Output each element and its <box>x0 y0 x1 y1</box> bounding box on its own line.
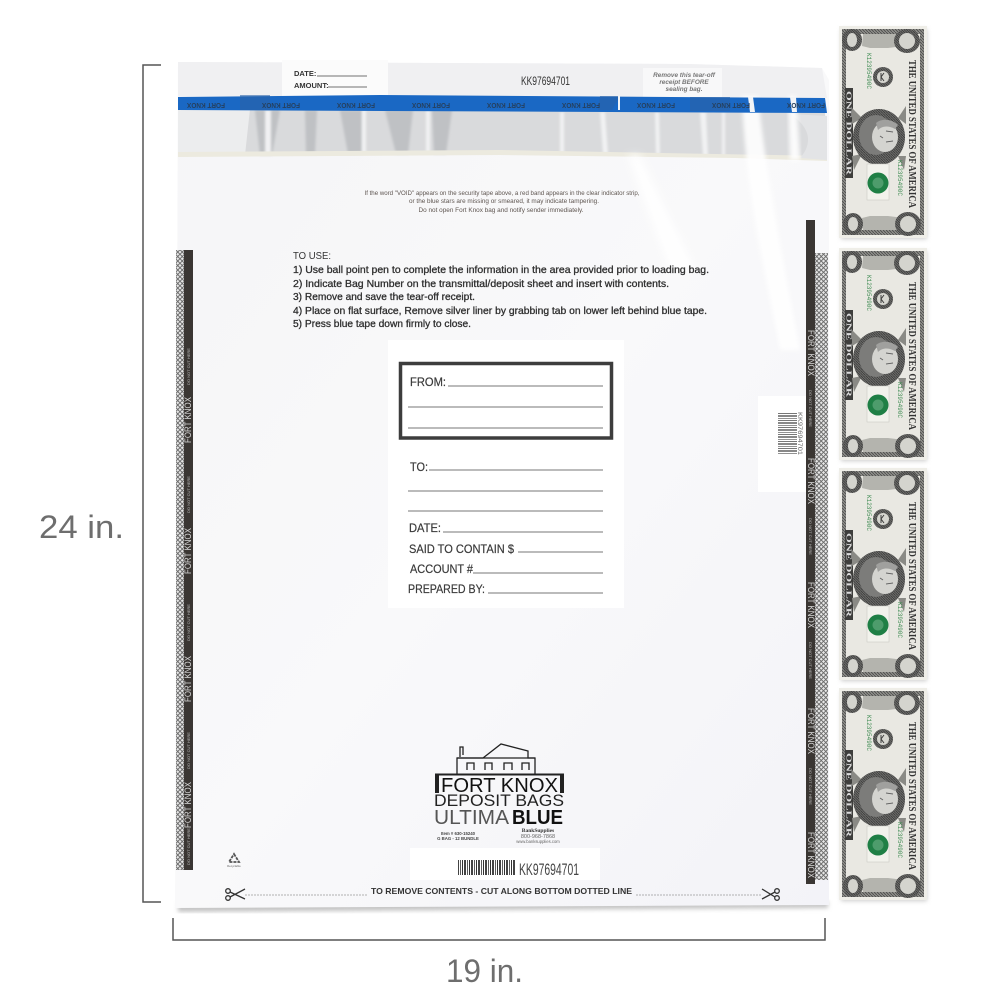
contents field: SAID TO CONTAIN $ <box>409 542 514 556</box>
right side seal strip <box>805 220 828 884</box>
dollar bill 2: K12395490C <box>865 275 872 311</box>
to fields: TO: <box>410 460 428 474</box>
account field: ACCOUNT # <box>410 562 473 576</box>
left side seal strip: DO NOT CUT HERE <box>186 828 191 865</box>
instructions: 5) Press blue tape down firmly to close. <box>293 318 471 330</box>
instructions: TO USE: <box>293 250 331 262</box>
dollar bill 3: K12395490C <box>896 602 903 638</box>
BankSupplies contact: www.banksupplies.com <box>516 839 560 844</box>
icon: right scissors <box>762 889 779 900</box>
dollar bill 4: K12395490C <box>896 822 903 858</box>
item number <box>437 831 479 841</box>
logo: FORT KNOX: FORT KNOX <box>441 775 558 797</box>
instructions <box>293 250 709 330</box>
dollar bill 4 <box>839 688 927 901</box>
dollar bill 4: THE UNITED STATES OF AMERICA <box>906 722 917 870</box>
deposit bag <box>175 60 829 912</box>
blue security tape: FORT KNOX <box>412 101 450 110</box>
dollar bill 2 <box>839 248 927 461</box>
bottom barcode label <box>410 848 600 880</box>
right side seal strip: DO NOT CUT HERE <box>808 390 813 427</box>
right side seal strip: FORT KNOX <box>805 458 816 505</box>
VOID warning note: or the blue stars are missing or smeared, it may indicate tampering. <box>409 198 599 205</box>
blue security tape: FORT KNOX <box>262 101 300 110</box>
BankSupplies contact: 800-968-7868 <box>521 834 555 840</box>
dimension: width label: 19 in. <box>446 953 523 989</box>
left side seal strip: FORT KNOX <box>183 396 194 443</box>
right side seal strip: FORT KNOX <box>805 582 816 629</box>
bottom barcode label: KK97694701 <box>519 860 579 879</box>
left side seal strip: DO NOT CUT HERE <box>186 476 191 513</box>
blue security tape: FORT KNOX <box>562 101 600 110</box>
logo: ULTIMA BLUE: ULTIMA <box>434 807 510 829</box>
logo building <box>435 744 564 775</box>
dollar bill 2: K12395490C <box>896 382 903 418</box>
dimension: width bracket <box>173 918 825 940</box>
BankSupplies contact: BankSupplies <box>522 828 554 834</box>
blue security tape: FORT KNOX <box>337 101 375 110</box>
blue security tape: FORT KNOX <box>487 101 525 110</box>
dollar bill 4: K12395490C <box>865 715 872 751</box>
logo bars <box>435 775 564 793</box>
cut instruction: TO REMOVE CONTENTS - CUT ALONG BOTTOM DOTTED LINE <box>371 886 632 896</box>
blue security tape: FORT KNOX <box>787 101 825 110</box>
blue security tape <box>178 95 827 113</box>
logo: DEPOSIT BAGS: DEPOSIT BAGS <box>434 791 564 810</box>
address form <box>388 340 624 608</box>
receipt date and amount fields: DATE: <box>294 69 316 78</box>
instructions: 2) Indicate Bag Number on the transmittal/deposit sheet and insert with contents. <box>293 278 669 290</box>
item number: G BAG - 12 BUNDLE <box>437 836 479 841</box>
cut line <box>245 894 762 896</box>
top bag number: KK97694701 <box>521 74 570 88</box>
instructions: 3) Remove and save the tear-off receipt. <box>293 291 475 303</box>
dollar bill 3 <box>839 468 927 681</box>
size comparison: stacked dollar bills <box>839 26 927 901</box>
right side seal strip: FORT KNOX <box>805 832 816 879</box>
dollar bill 3: ONE DOLLAR <box>844 533 854 618</box>
date field: DATE: <box>409 521 441 535</box>
left side seal strip: DO NOT CUT HERE <box>186 348 191 385</box>
side barcode label <box>758 396 806 492</box>
plastic reflections <box>628 96 800 350</box>
instructions: 4) Place on flat surface, Remove silver liner by grabbing tab on lower left behind blue tape. <box>293 305 707 317</box>
instructions: 1) Use ball point pen to complete the information in the area provided prior to loading bag. <box>293 264 709 276</box>
VOID warning note: If the word "VOID" appears on the security tape above, a red band appears in the clear indicator strip, <box>364 190 640 197</box>
bag body <box>175 62 829 908</box>
left side seal strip <box>176 250 194 870</box>
BankSupplies contact <box>516 828 560 844</box>
top flap <box>178 62 827 98</box>
dimension: height label: 24 in. <box>39 509 124 545</box>
left side seal strip: DO NOT CUT HERE <box>186 604 191 641</box>
right side seal strip: FORT KNOX <box>805 708 816 755</box>
from box: FROM: <box>410 375 446 389</box>
right side seal strip: FORT KNOX <box>805 330 816 377</box>
dollar bill 1: THE UNITED STATES OF AMERICA <box>906 60 917 208</box>
silver liner <box>178 109 827 161</box>
VOID warning note <box>364 190 640 214</box>
bag shadow <box>178 901 828 912</box>
tear-off note: Remove this tear-off <box>653 72 716 79</box>
VOID warning note: Do not open Fort Knox bag and notify sender immediately. <box>418 207 584 214</box>
left side seal strip: FORT KNOX <box>183 655 194 702</box>
receipt date and amount fields: AMOUNT: <box>294 81 329 90</box>
dollar bill 1: ONE DOLLAR <box>844 91 854 176</box>
left side seal strip: FORT KNOX <box>183 527 194 574</box>
dollar bill 1 <box>839 26 927 239</box>
dollar bill 2: ONE DOLLAR <box>844 313 854 398</box>
right side seal strip: DO NOT CUT HERE <box>808 768 813 805</box>
blue security tape: FORT KNOX <box>187 101 225 110</box>
logo: ULTIMA BLUE <box>434 807 563 829</box>
icon: left scissors <box>226 889 245 900</box>
left side seal strip: DO NOT CUT HERE <box>186 732 191 769</box>
receipt date and amount fields <box>294 69 367 90</box>
icon: recycle <box>227 854 241 868</box>
dollar bill 4: ONE DOLLAR <box>844 753 854 838</box>
dollar bill 1: K12395490C <box>865 53 872 89</box>
tear-off note: sealing bag. <box>666 86 703 93</box>
form background <box>388 340 624 608</box>
from box <box>400 364 612 438</box>
dollar bill 3: K12395490C <box>865 495 872 531</box>
logo: ULTIMA BLUE: BLUE <box>512 807 563 829</box>
right side seal strip: DO NOT CUT HERE <box>808 518 813 555</box>
tear-off note <box>643 68 722 97</box>
dollar bill 1: K12395490C <box>896 160 903 196</box>
blue security tape: FORT KNOX <box>637 101 675 110</box>
receipt patch <box>282 60 388 97</box>
blue security tape: FORT KNOX <box>712 101 750 110</box>
dollar bill 3: THE UNITED STATES OF AMERICA <box>906 502 917 650</box>
icon: recycle: Recyclable <box>227 864 241 868</box>
dimension: height bracket <box>143 65 161 902</box>
prepared by field: PREPARED BY: <box>408 582 485 596</box>
side barcode label: KK97694701 <box>796 412 803 455</box>
right side seal strip: DO NOT CUT HERE <box>808 642 813 679</box>
left side seal strip: FORT KNOX <box>183 781 194 828</box>
item number: Item # 630-15240 <box>441 831 476 836</box>
dollar bill 2: THE UNITED STATES OF AMERICA <box>906 282 917 430</box>
to fields <box>408 460 603 511</box>
Fort Knox logo <box>434 744 564 844</box>
tear-off note: receipt BEFORE <box>659 79 709 86</box>
